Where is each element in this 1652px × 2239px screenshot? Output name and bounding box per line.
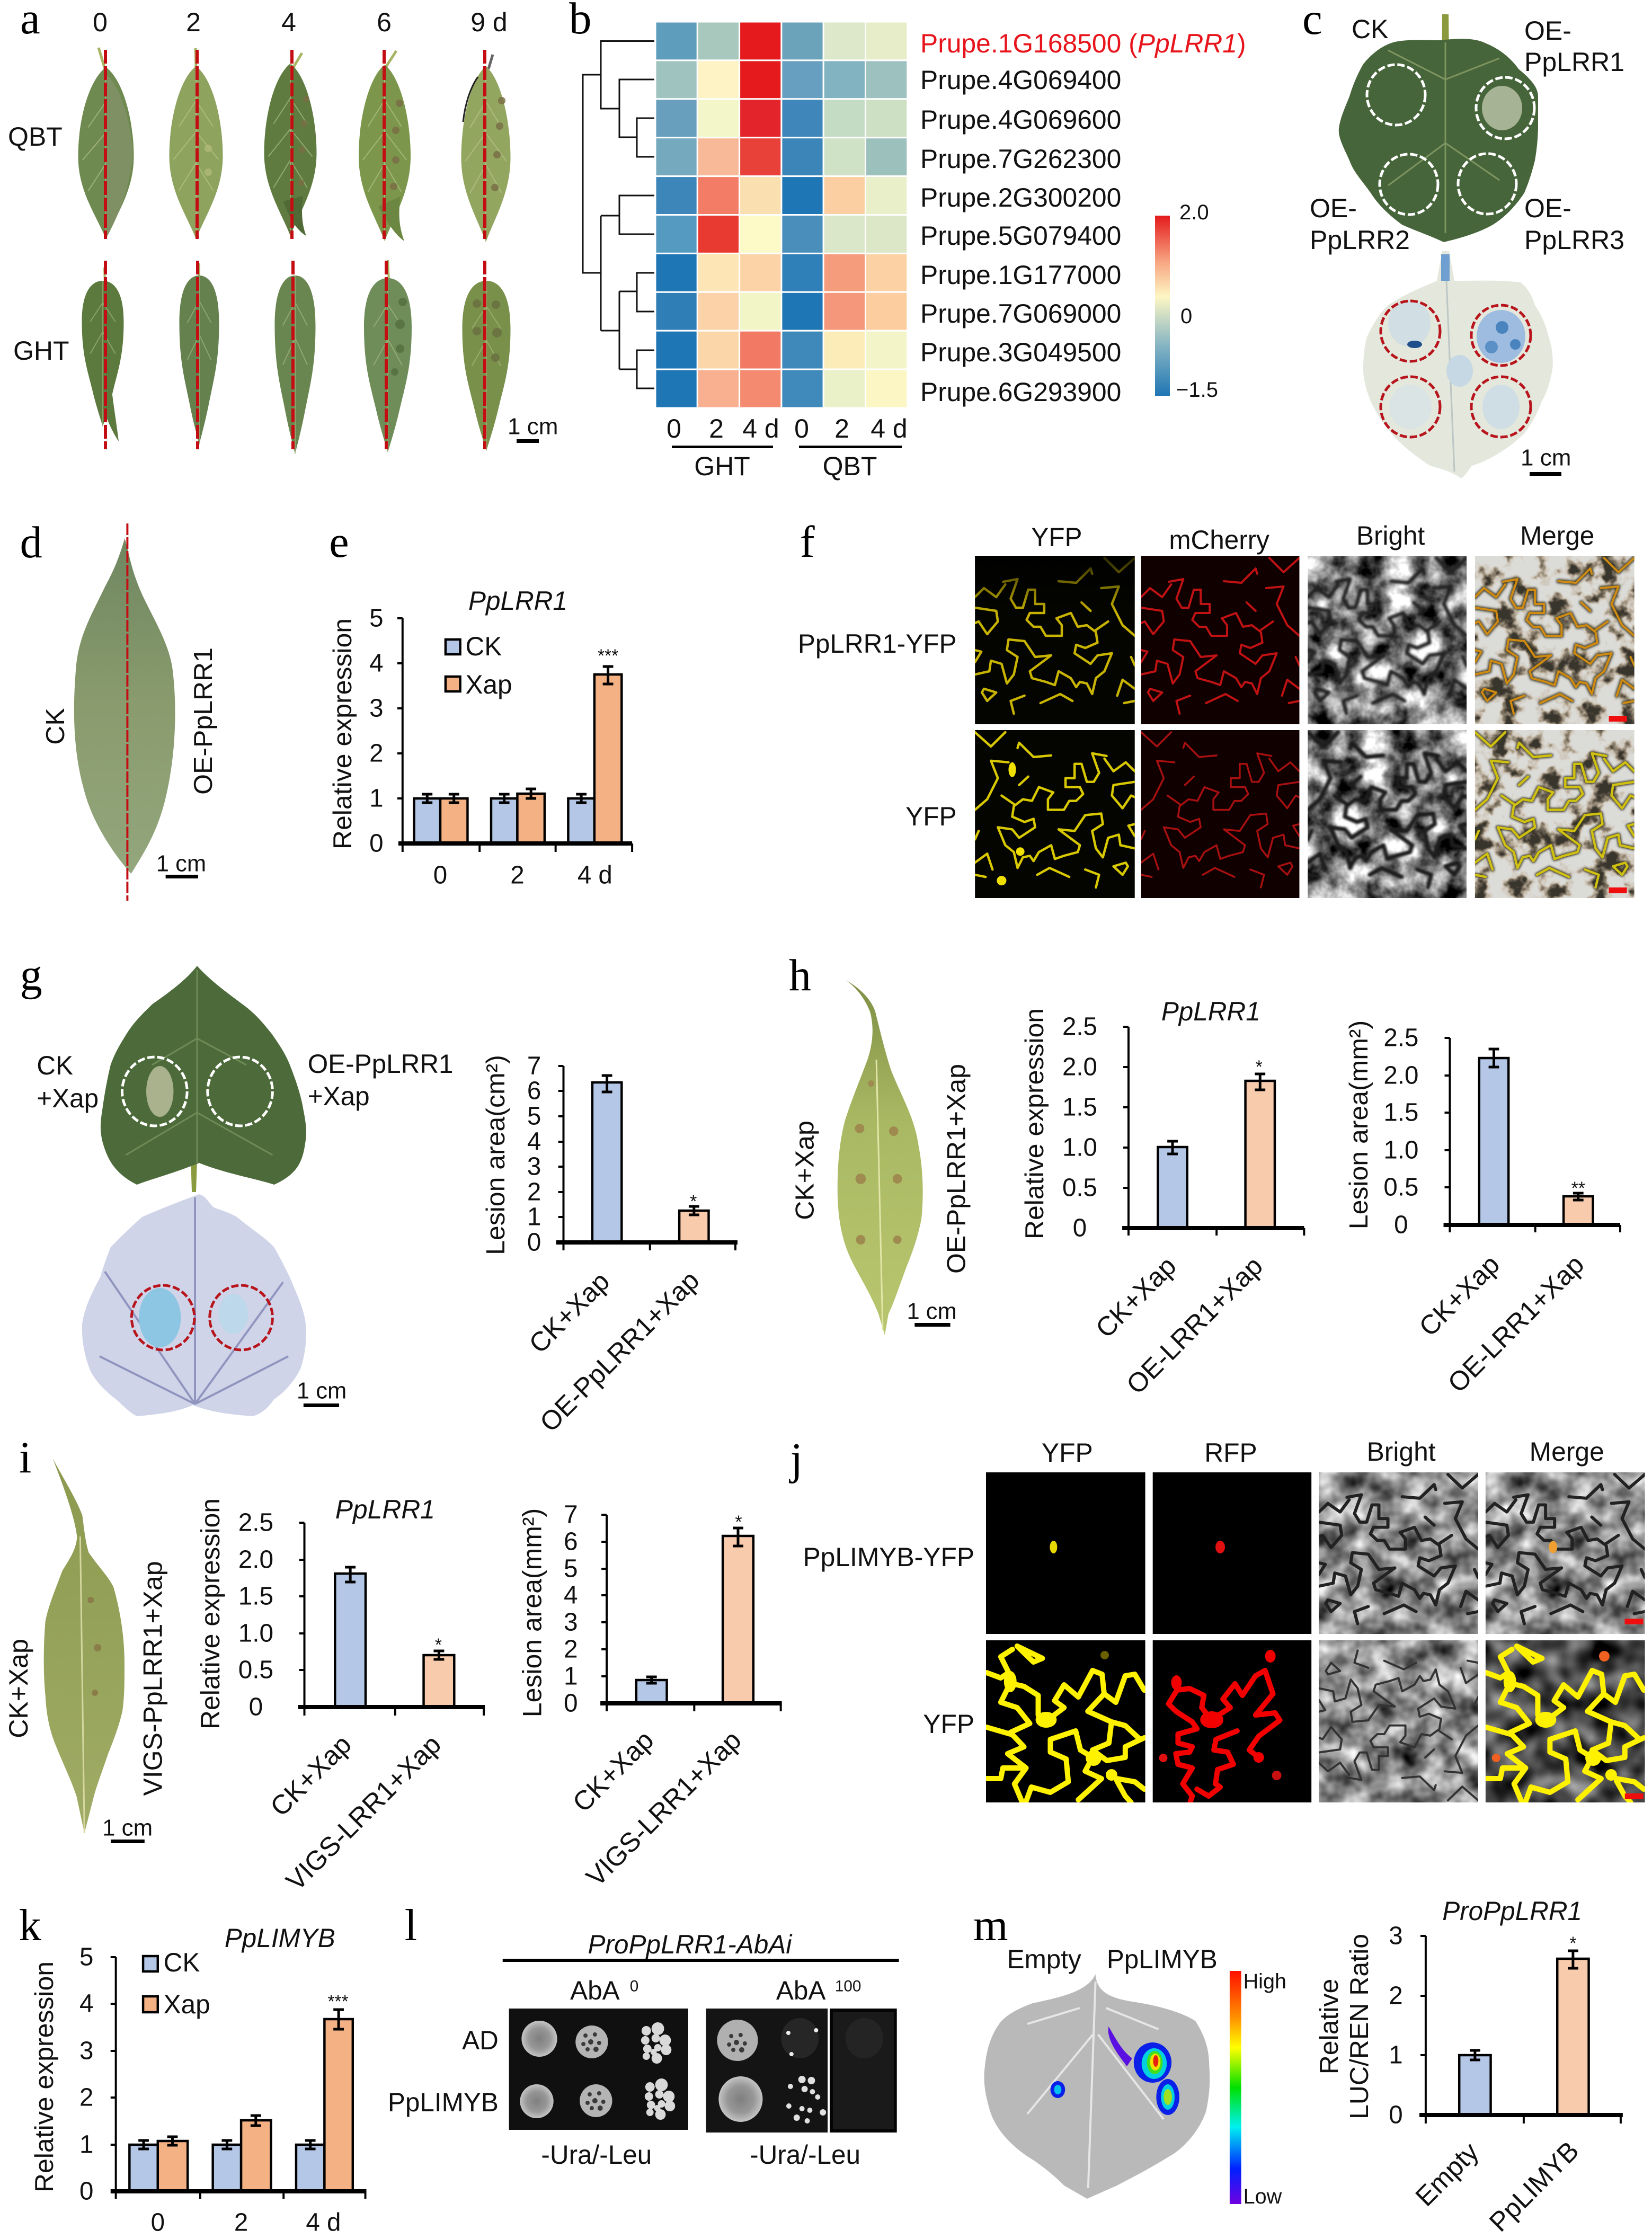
- heatmap x labels: 2: [709, 414, 724, 443]
- label CK: CK: [40, 708, 70, 745]
- header: [503, 1930, 899, 1962]
- y axis numbers: 2: [79, 2083, 93, 2112]
- panel h: peach leaf overexpression: [789, 951, 1620, 1400]
- y axis numbers: 0: [527, 1228, 541, 1257]
- y axis numbers: 0.5: [1062, 1174, 1097, 1202]
- image: PpLRR1-YFP bright field: [1308, 556, 1467, 724]
- x labels: CK+Xap: [523, 1266, 615, 1359]
- x axis baseline: [111, 2189, 367, 2193]
- axes: [1420, 1936, 1621, 2124]
- y axis numbers: 4: [527, 1127, 541, 1156]
- column headers: [1042, 1437, 1604, 1468]
- y axis numbers: 0: [79, 2177, 93, 2206]
- y axis numbers: 4: [79, 1989, 93, 2018]
- axes: [558, 1066, 735, 1250]
- heatmap x labels: 0: [667, 414, 681, 443]
- significance star: *: [1256, 1057, 1263, 1077]
- x labels: OE-PpLRR1+Xap: [534, 1265, 705, 1437]
- y axis numbers: 2.0: [1383, 1061, 1418, 1090]
- AbA concentration labels: 100: [835, 1977, 861, 1995]
- legend: CK: [465, 632, 502, 661]
- day labels: 2: [186, 7, 201, 37]
- x labels: OE-LRR1+Xap: [1442, 1249, 1589, 1398]
- day labels: [93, 7, 508, 37]
- y axis numbers: 0.5: [1383, 1173, 1418, 1202]
- x axis labels: 0: [151, 2208, 165, 2237]
- x labels: CK+Xap: [1090, 1250, 1182, 1344]
- gene labels: Prupe.2G300200: [920, 183, 1121, 212]
- significance star: *: [1569, 1933, 1576, 1953]
- x labels: VIGS-LRR1+Xap: [580, 1725, 747, 1892]
- leaf: [44, 1459, 125, 1833]
- x axis baseline: [1122, 1226, 1304, 1230]
- x labels: OE-LRR1+Xap: [1121, 1250, 1268, 1400]
- panel f: subcellular localisation PpLRR1: [798, 518, 1635, 898]
- image: PpLIMYB-YFP bright field: [1319, 1472, 1478, 1634]
- day labels: 6: [377, 7, 392, 37]
- scale bar 1 cm: 1 cm: [102, 1815, 153, 1841]
- image: YFP control bright field: [1308, 730, 1467, 898]
- day labels: 9 d: [470, 7, 508, 37]
- heatmap x labels: [667, 414, 908, 481]
- row labels: YFP: [905, 802, 956, 831]
- panel d: overexpression leaf: [20, 518, 218, 901]
- header: ProPpLRR1-AbAi: [588, 1930, 793, 1959]
- significance stars: ***: [327, 1992, 349, 2012]
- axes: [1445, 1038, 1620, 1232]
- dendrogram: [583, 41, 654, 388]
- panel letter j: j: [789, 1434, 803, 1484]
- expression bar chart: [196, 1495, 485, 1896]
- red dashed midlines: [105, 50, 485, 449]
- row labels: AD: [462, 2025, 499, 2055]
- panel l: yeast one-hybrid: [388, 1901, 899, 2170]
- construct labels: PpLRR2: [1310, 225, 1410, 255]
- leaf: [838, 980, 923, 1335]
- y axis numbers: 2.0: [238, 1545, 273, 1574]
- leaf labels: CK: [37, 1051, 73, 1080]
- significance star: *: [690, 1192, 697, 1212]
- y axis numbers: [1389, 1922, 1403, 2129]
- y axis numbers: 4: [369, 649, 384, 678]
- gene labels: Prupe.1G168500 (PpLRR1): [920, 29, 1246, 58]
- y axis label: LUC/REN Ratio: [1344, 1934, 1374, 2119]
- axes: [601, 1515, 781, 1711]
- scale bar 1 cm: 1 cm: [508, 413, 558, 440]
- image: YFP control merge: [1486, 1640, 1645, 1802]
- yeast plate AbA 100: [706, 2009, 897, 2133]
- y axis label: Relative expression: [196, 1498, 225, 1729]
- x labels: CK+Xap: [1413, 1249, 1505, 1342]
- gene labels: Prupe.7G069000: [920, 299, 1121, 328]
- y axis label: Relative expression: [1019, 1008, 1049, 1239]
- x axis labels: 2: [234, 2208, 248, 2237]
- panel j: subcellular localisation PpLIMYB: [789, 1434, 1645, 1802]
- y axis numbers: 1.5: [1062, 1093, 1097, 1122]
- y axis label: Lesion area(cm²): [481, 1055, 510, 1255]
- y axis numbers: 1.5: [1383, 1098, 1418, 1127]
- bars: [129, 2010, 353, 2191]
- chart title: PpLRR1: [468, 586, 567, 616]
- y axis numbers: 0.5: [238, 1656, 273, 1684]
- y axis numbers: 2: [369, 739, 384, 768]
- y axis numbers: 1.0: [1383, 1136, 1418, 1165]
- chart title: PpLRR1: [335, 1495, 435, 1524]
- row labels: YFP: [923, 1709, 974, 1739]
- y axis numbers: 5: [79, 1943, 93, 1971]
- row labels: PpLIMYB-YFP: [803, 1542, 974, 1572]
- legend: [143, 1948, 210, 2019]
- bars: [414, 667, 621, 843]
- image: PpLRR1-YFP YFP channel: [975, 556, 1135, 724]
- y axis numbers: [527, 1052, 541, 1257]
- y axis label: Lesion area(mm²): [1344, 1020, 1373, 1229]
- y axis numbers: 7: [564, 1500, 578, 1529]
- gene labels: Prupe.7G262300: [920, 144, 1121, 174]
- y axis numbers: 5: [527, 1102, 541, 1131]
- y axis label: Relative: [1314, 1979, 1344, 2074]
- significance star: *: [435, 1635, 442, 1655]
- column headers: RFP: [1204, 1438, 1257, 1468]
- luminescence colour bar: [1230, 1970, 1286, 2208]
- x labels: PpLIMYB: [1484, 2135, 1584, 2237]
- construct labels: PpLRR3: [1524, 225, 1624, 255]
- image: YFP control mCherry channel: [1141, 730, 1299, 898]
- construct labels: OE-: [1310, 193, 1357, 223]
- medium labels: [541, 2140, 860, 2170]
- panel k: PpLIMYB expression chart: [19, 1901, 367, 2237]
- panel m: luciferase assay: [973, 1896, 1623, 2237]
- y axis numbers: 3: [564, 1608, 578, 1637]
- y axis numbers: [369, 604, 384, 858]
- day labels: 4: [281, 7, 296, 37]
- scale bar 1 cm: 1 cm: [156, 850, 206, 877]
- x axis baseline: [298, 1705, 485, 1709]
- gene labels: Prupe.1G177000: [920, 260, 1121, 290]
- label OE-PpLRR1: OE-PpLRR1: [188, 647, 218, 795]
- significance stars: ***: [598, 646, 618, 666]
- red dashed midline: [126, 523, 128, 901]
- yeast plate AbA 0: [509, 2009, 688, 2130]
- construct labels: OE-: [1524, 193, 1571, 223]
- image: PpLRR1-YFP merge: [1475, 556, 1635, 724]
- y axis numbers: 2.0: [1062, 1053, 1097, 1081]
- y axis numbers: 4: [564, 1581, 578, 1610]
- column headers: YFP: [1031, 522, 1082, 552]
- axes: [397, 618, 632, 852]
- y axis numbers: 2.5: [238, 1508, 273, 1537]
- colour scale: −1.5: [1176, 378, 1218, 402]
- y axis numbers: 0: [1389, 2101, 1403, 2129]
- bars: [1459, 1951, 1589, 2115]
- bars: [335, 1567, 454, 1707]
- legend: Xap: [465, 670, 512, 699]
- y axis label: Relative expression: [327, 618, 357, 849]
- construct labels: OE-: [1524, 16, 1571, 46]
- GHT leaves: [82, 260, 511, 454]
- legend: Xap: [164, 1989, 210, 2019]
- y axis numbers: [1383, 1024, 1418, 1239]
- medium labels: -Ura/-Leu: [750, 2140, 860, 2170]
- LUC/REN bar chart: [1314, 1896, 1623, 2237]
- x labels: CK+Xap: [567, 1725, 659, 1818]
- y axis numbers: 0: [564, 1689, 578, 1718]
- y axis numbers: 6: [564, 1527, 578, 1556]
- x axis labels: 0: [433, 861, 447, 890]
- panel i: VIGS leaf: [4, 1433, 782, 1896]
- gene labels: Prupe.6G293900: [920, 377, 1121, 407]
- y axis numbers: [564, 1500, 578, 1718]
- label VIGS-PpLRR1+Xap: VIGS-PpLRR1+Xap: [138, 1561, 168, 1796]
- y axis label: Lesion area(mm²): [518, 1508, 547, 1717]
- y axis numbers: 0: [1394, 1211, 1408, 1239]
- y axis label: [1314, 1934, 1374, 2119]
- y axis numbers: 2.5: [1062, 1012, 1097, 1041]
- x labels: Empty: [1409, 2136, 1485, 2212]
- leaf labels: [37, 1049, 454, 1113]
- trypan blue stained leaf: [82, 1194, 306, 1416]
- y axis numbers: 3: [1389, 1922, 1403, 1950]
- y axis numbers: 1.0: [1062, 1133, 1097, 1162]
- x axis labels: [151, 2208, 341, 2237]
- gene labels: [920, 29, 1246, 407]
- scale bar 1 cm: 1 cm: [1521, 445, 1571, 470]
- construct labels: CK: [1352, 14, 1388, 44]
- column headers: [1031, 521, 1594, 555]
- panel e: PpLRR1 expression chart: [327, 518, 632, 890]
- significance stars: **: [1571, 1178, 1585, 1198]
- x axis baseline: [600, 1701, 782, 1705]
- y axis numbers: 1: [79, 2130, 93, 2159]
- row labels: PpLRR1-YFP: [798, 629, 956, 659]
- chart title: PpLIMYB: [225, 1923, 335, 1953]
- y axis numbers: [238, 1508, 273, 1721]
- luminescence colour bar: Low: [1244, 2185, 1282, 2208]
- y axis numbers: 3: [369, 694, 384, 723]
- row labels: [803, 1542, 974, 1739]
- x labels: VIGS-LRR1+Xap: [280, 1729, 447, 1896]
- legend: CK: [164, 1948, 200, 1977]
- panel g: Nicotiana leaf assay: [20, 950, 738, 1437]
- y axis numbers: 5: [369, 604, 384, 633]
- y axis numbers: 2: [564, 1635, 578, 1664]
- y axis numbers: 1: [1389, 2041, 1403, 2069]
- panel letter h: h: [789, 951, 811, 1000]
- chart title: PpLRR1: [1161, 997, 1260, 1026]
- lesion area bar chart: [518, 1500, 782, 1892]
- heatmap x labels: 4 d: [871, 414, 908, 443]
- row labels: [388, 2025, 499, 2117]
- lesion area bar chart: [481, 1052, 738, 1437]
- x labels: CK+Xap: [264, 1729, 357, 1822]
- y axis numbers: 6: [527, 1077, 541, 1105]
- y axis numbers: 5: [564, 1554, 578, 1583]
- panel letter d: d: [20, 518, 42, 567]
- x axis labels: [433, 861, 612, 890]
- row label QBT: QBT: [8, 122, 63, 152]
- image: PpLIMYB-YFP YFP channel: [986, 1472, 1145, 1634]
- y axis numbers: 1: [527, 1203, 541, 1231]
- bars: [1158, 1074, 1275, 1228]
- y axis numbers: 3: [527, 1152, 541, 1181]
- leaf: [74, 538, 175, 874]
- x axis labels: 2: [510, 861, 525, 890]
- y axis numbers: 7: [527, 1052, 541, 1080]
- scale bar 1 cm: 1 cm: [907, 1298, 957, 1325]
- leaf labels: OE-PpLRR1: [308, 1049, 454, 1079]
- column headers: Merge: [1530, 1437, 1604, 1467]
- colour scale: 2.0: [1179, 201, 1209, 224]
- axes: [299, 1523, 484, 1716]
- legend: [446, 632, 512, 699]
- x axis baseline: [1419, 2113, 1623, 2117]
- leaf labels: +Xap: [308, 1081, 370, 1111]
- image: YFP control YFP channel: [985, 1640, 1145, 1802]
- heatmap x labels: QBT: [823, 451, 877, 481]
- infected leaf: [1339, 14, 1538, 242]
- y axis numbers: 2.5: [1383, 1024, 1418, 1052]
- bars: [592, 1076, 709, 1242]
- gene labels: Prupe.5G079400: [920, 221, 1121, 251]
- row labels: [798, 629, 956, 831]
- panel letter i: i: [19, 1433, 31, 1482]
- heatmap x labels: 4 d: [742, 414, 779, 443]
- trypan blue stained leaf: [1363, 251, 1553, 478]
- image: YFP control RFP channel: [1153, 1640, 1312, 1802]
- panel letter g: g: [20, 950, 42, 1000]
- bars: [1479, 1049, 1593, 1225]
- medium labels: -Ura/-Leu: [541, 2140, 652, 2170]
- gene labels: Prupe.3G049500: [920, 337, 1121, 367]
- AbA concentration labels: [570, 1976, 861, 2005]
- y axis numbers: 1: [564, 1662, 578, 1691]
- y axis numbers: 3: [79, 2037, 93, 2065]
- panel b: heatmap: [569, 0, 1246, 481]
- label OE-PpLRR1+Xap: OE-PpLRR1+Xap: [942, 1064, 971, 1274]
- AbA concentration labels: AbA: [570, 1976, 620, 2005]
- y axis numbers: [79, 1943, 93, 2206]
- infected leaf: [101, 966, 306, 1192]
- panel letter e: e: [329, 518, 349, 567]
- day labels: 0: [93, 7, 108, 37]
- image: YFP control bright field: [1319, 1640, 1478, 1802]
- y axis numbers: 1: [369, 784, 384, 813]
- panel letter l: l: [405, 1901, 417, 1950]
- panel c: leaf transient overexpression: [1302, 0, 1624, 478]
- image: YFP control YFP channel: [975, 730, 1135, 898]
- x axis labels: 4 d: [306, 2208, 341, 2237]
- image: PpLRR1-YFP mCherry channel: [1141, 556, 1299, 724]
- significance star: *: [735, 1512, 742, 1532]
- gene labels: Prupe.4G069400: [920, 65, 1121, 95]
- axes: [111, 1957, 366, 2199]
- column headers: Merge: [1520, 521, 1594, 550]
- column headers: YFP: [1042, 1438, 1093, 1468]
- construct labels: [1310, 14, 1624, 255]
- y axis numbers: 2: [1389, 1982, 1403, 2010]
- heatmap x labels: GHT: [694, 451, 750, 481]
- scale bar 1 cm: 1 cm: [297, 1378, 347, 1404]
- bars: [636, 1528, 753, 1703]
- construct labels: PpLRR1: [1524, 47, 1624, 77]
- chart title: ProPpLRR1: [1442, 1896, 1582, 1926]
- row labels: PpLIMYB: [388, 2087, 499, 2117]
- colour scale: 0: [1180, 305, 1192, 328]
- leaf labels: Empty: [1007, 1944, 1081, 1974]
- leaf labels: PpLIMYB: [1107, 1944, 1218, 1974]
- colour scale: [1155, 201, 1218, 402]
- AbA concentration labels: 0: [630, 1977, 638, 1995]
- y axis numbers: 0: [249, 1693, 263, 1721]
- y axis numbers: 1.5: [238, 1582, 273, 1611]
- AbA concentration labels: AbA: [776, 1976, 826, 2005]
- x axis baseline: [398, 841, 632, 846]
- image: PpLIMYB-YFP RFP channel: [1153, 1472, 1312, 1634]
- label CK+Xap: CK+Xap: [4, 1639, 33, 1738]
- panel letter k: k: [19, 1901, 41, 1950]
- x labels: [1409, 2135, 1584, 2237]
- y axis numbers: 0: [1073, 1214, 1087, 1242]
- y axis numbers: [1062, 1012, 1097, 1242]
- x axis baseline: [556, 1240, 738, 1245]
- leaf labels: +Xap: [37, 1083, 99, 1113]
- label CK+Xap: CK+Xap: [790, 1121, 819, 1220]
- column headers: Bright: [1367, 1437, 1436, 1467]
- y axis numbers: 2: [527, 1178, 541, 1206]
- image: YFP control merge: [1475, 730, 1635, 898]
- column headers: Bright: [1356, 521, 1425, 550]
- lesion area bar chart: [1344, 1020, 1620, 1398]
- y axis numbers: 0: [369, 829, 384, 858]
- heatmap cells: [655, 22, 908, 408]
- expression bar chart: [1019, 997, 1304, 1400]
- luminescence leaf image: [984, 1974, 1210, 2199]
- column headers: mCherry: [1169, 525, 1269, 555]
- y axis numbers: 1.0: [238, 1619, 273, 1648]
- panel letter f: f: [800, 518, 815, 567]
- x axis labels: 4 d: [578, 861, 612, 890]
- gene labels: Prupe.4G069600: [920, 105, 1121, 135]
- axes: [1123, 1027, 1304, 1236]
- x axis baseline: [1444, 1223, 1620, 1227]
- heatmap x labels: 0: [794, 414, 809, 443]
- row label GHT: GHT: [13, 336, 69, 366]
- leaf labels: [1007, 1944, 1218, 1974]
- panel letter m: m: [973, 1901, 1008, 1950]
- heatmap x labels: 2: [834, 414, 849, 443]
- image: PpLIMYB-YFP merge: [1486, 1472, 1645, 1634]
- luminescence colour bar: High: [1244, 1970, 1286, 1993]
- y axis label: Relative expression: [29, 1961, 59, 2192]
- QBT leaves: [78, 48, 511, 242]
- panel a: leaf time course: [8, 0, 558, 454]
